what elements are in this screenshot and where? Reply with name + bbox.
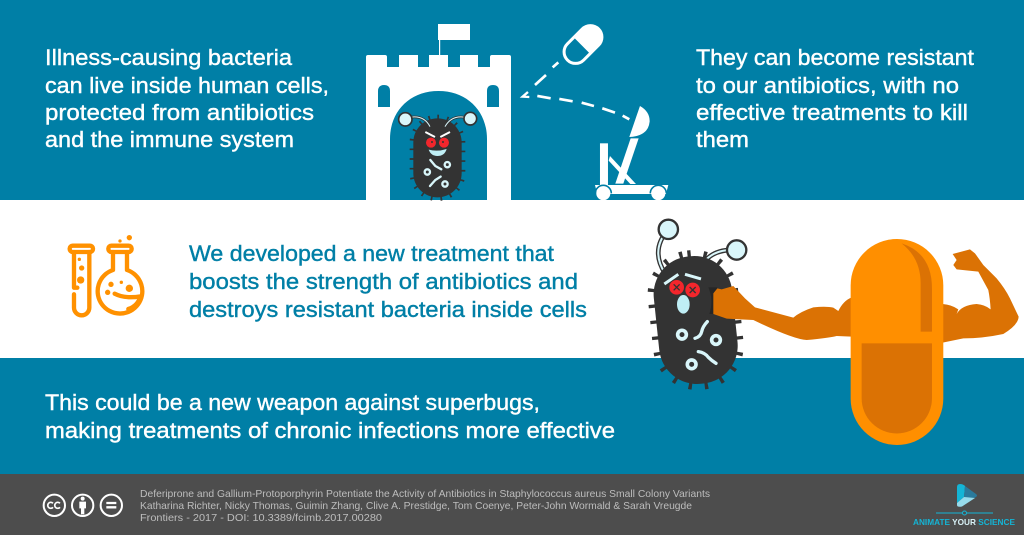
text: bacteria live inside cells: and the immune system <box>45 127 294 152</box>
text: resistance to antibiotics <box>696 45 975 152</box>
text: citation: Frontiers - 2017 - DOI: 10.3389/fcimb.2017.00280 <box>140 512 382 524</box>
icon: defeated bacterium <box>648 220 746 390</box>
text: citation: Deferiprone and Gallium-Protoporphyrin Potentiate the Activity of Antibiotics in Staphylococcus aureus Small Colony Variants <box>140 488 710 500</box>
text: new treatment statement: boosts the strength of antibiotics and <box>189 269 578 294</box>
text: resistance to antibiotics: effective treatments to kill <box>696 100 968 125</box>
text: bacteria live inside cells: Illness-causing bacteria <box>45 45 293 70</box>
icon: test tube and flask <box>70 235 142 315</box>
text: resistance to antibiotics: them <box>696 127 749 152</box>
icon: catapult <box>595 106 668 200</box>
text: citation: Katharina Richter, Nicky Thomas, Guimin Zhang, Clive A. Prestidge, Tom Coenye, Peter-John Wormald & Sarah Vreugde <box>140 500 692 512</box>
panel: white middle band <box>0 200 1024 358</box>
icon: right flexed arm <box>943 249 1019 343</box>
text: new weapon conclusion <box>45 390 615 443</box>
text: new weapon conclusion: This could be a new weapon against superbugs, <box>45 390 540 415</box>
text: new weapon conclusion: making treatments of chronic infections more effective <box>45 418 615 443</box>
text: new treatment statement: We developed a new treatment that <box>189 241 555 266</box>
text: bacteria live inside cells: can live inside human cells, <box>45 73 329 98</box>
text: new treatment statement: destroys resistant bacteria inside cells <box>189 297 587 322</box>
panel: footer <box>0 474 1024 535</box>
logo: Animate Your Science <box>913 484 1015 527</box>
logo: Animate Your Science: ANIMATE YOUR SCIENCE <box>913 517 1015 527</box>
icon: creative commons badges <box>44 495 122 516</box>
illustration: pill punching bacterium <box>648 220 1019 445</box>
icon: pill flying toward castle <box>559 21 607 68</box>
text: bacteria live inside cells <box>45 45 329 152</box>
text: new treatment statement <box>189 241 587 322</box>
text: citation <box>140 488 710 524</box>
icon: castle with flag <box>366 24 511 200</box>
text: resistance to antibiotics: They can become resistant <box>696 45 975 70</box>
text: resistance to antibiotics: to our antibiotics, with no <box>696 73 959 98</box>
arrow: catapult trajectory <box>523 92 629 119</box>
icon: left flexed arm punching <box>713 286 852 340</box>
text: bacteria live inside cells: protected from antibiotics <box>45 100 314 125</box>
icon: villain bacterium in castle <box>399 112 477 199</box>
arrow: pill trajectory <box>535 62 558 85</box>
icon: orange capsule <box>851 239 943 445</box>
